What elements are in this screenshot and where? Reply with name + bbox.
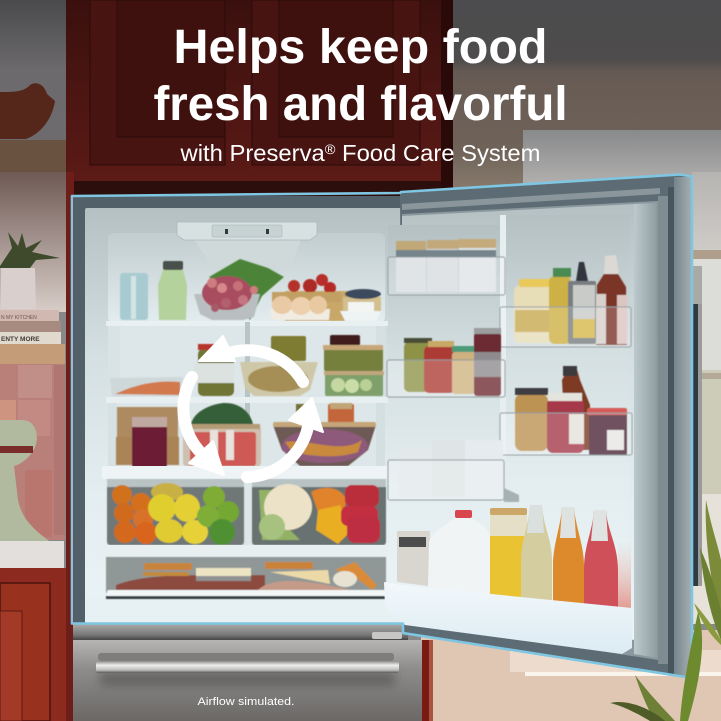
top wire shelf (106, 321, 388, 468)
background: kitchen left wall (0, 0, 70, 312)
door bin: pale juice bottle (521, 505, 552, 602)
background: fridge side handle (693, 266, 702, 586)
door shelf: pickles and sauces (387, 328, 505, 397)
title (154, 21, 568, 131)
control panel and air vent (177, 222, 317, 277)
background: pink tile wall (0, 364, 65, 540)
door bin: red juice bottle (584, 510, 618, 608)
background: red upper cabinet (66, 0, 453, 721)
door right edge (674, 177, 691, 676)
lower shelf (102, 466, 392, 479)
icon: drawer handle (96, 653, 399, 673)
middle shelf (106, 397, 388, 467)
door top frame stripe (402, 188, 660, 210)
door shelf: condiment bottles (500, 255, 631, 347)
subtitle: Food Care System (335, 140, 540, 166)
panel: open fridge door (388, 174, 692, 678)
crisper drawer: vegetables (252, 479, 386, 545)
deli drawer (106, 557, 387, 599)
background: wall below door (421, 630, 721, 721)
door liner (402, 204, 635, 640)
subtitle: with Preserva (180, 140, 320, 166)
icon: stand mixer (0, 420, 49, 547)
subtitle: ® (325, 141, 336, 157)
door bin: carton (397, 531, 430, 586)
background: books, vase and plant: N MY KITCHEN (1, 315, 37, 321)
door bin: orange juice bottle (553, 507, 584, 606)
deli shelf (102, 545, 390, 557)
background: counter and lower cabinet (0, 541, 66, 721)
panel: lower freezer drawer (73, 623, 422, 721)
footnote: Airflow simulated. (198, 696, 294, 708)
arrow: right (247, 398, 323, 477)
background: books, vase and plant: ENTY MORE (1, 336, 40, 343)
icon: mixer bowl band (0, 446, 33, 453)
door bin: juice jar (490, 508, 527, 597)
food: lower shelf (116, 403, 376, 467)
arrow: top (199, 336, 303, 382)
door shelf: white tubs (388, 440, 519, 502)
background: upper wooden shelf (0, 140, 67, 172)
door bin (384, 582, 632, 654)
icon: wooden bowl on shelf (0, 83, 55, 139)
title: Helps keep food (174, 21, 548, 74)
background: right wall and window (453, 0, 721, 624)
food: middle shelf (110, 335, 384, 396)
icon: circular airflow arrows (183, 336, 323, 477)
fridge interior (74, 196, 405, 623)
door bin: milk jug (428, 510, 490, 595)
door shelf: jars with wooden lids (388, 239, 505, 295)
crisper drawer: fruit (107, 479, 244, 545)
panel outline: light blue door and cabinet frame (72, 174, 692, 678)
hinge (372, 632, 402, 639)
title: fresh and flavorful (154, 78, 568, 131)
food: top shelf (120, 259, 381, 321)
background: books, vase and plant (0, 232, 65, 364)
arrow: left (183, 377, 224, 475)
door shelf: mustard, jam, syrup (500, 366, 632, 455)
icon: plant bottom right (610, 500, 721, 721)
